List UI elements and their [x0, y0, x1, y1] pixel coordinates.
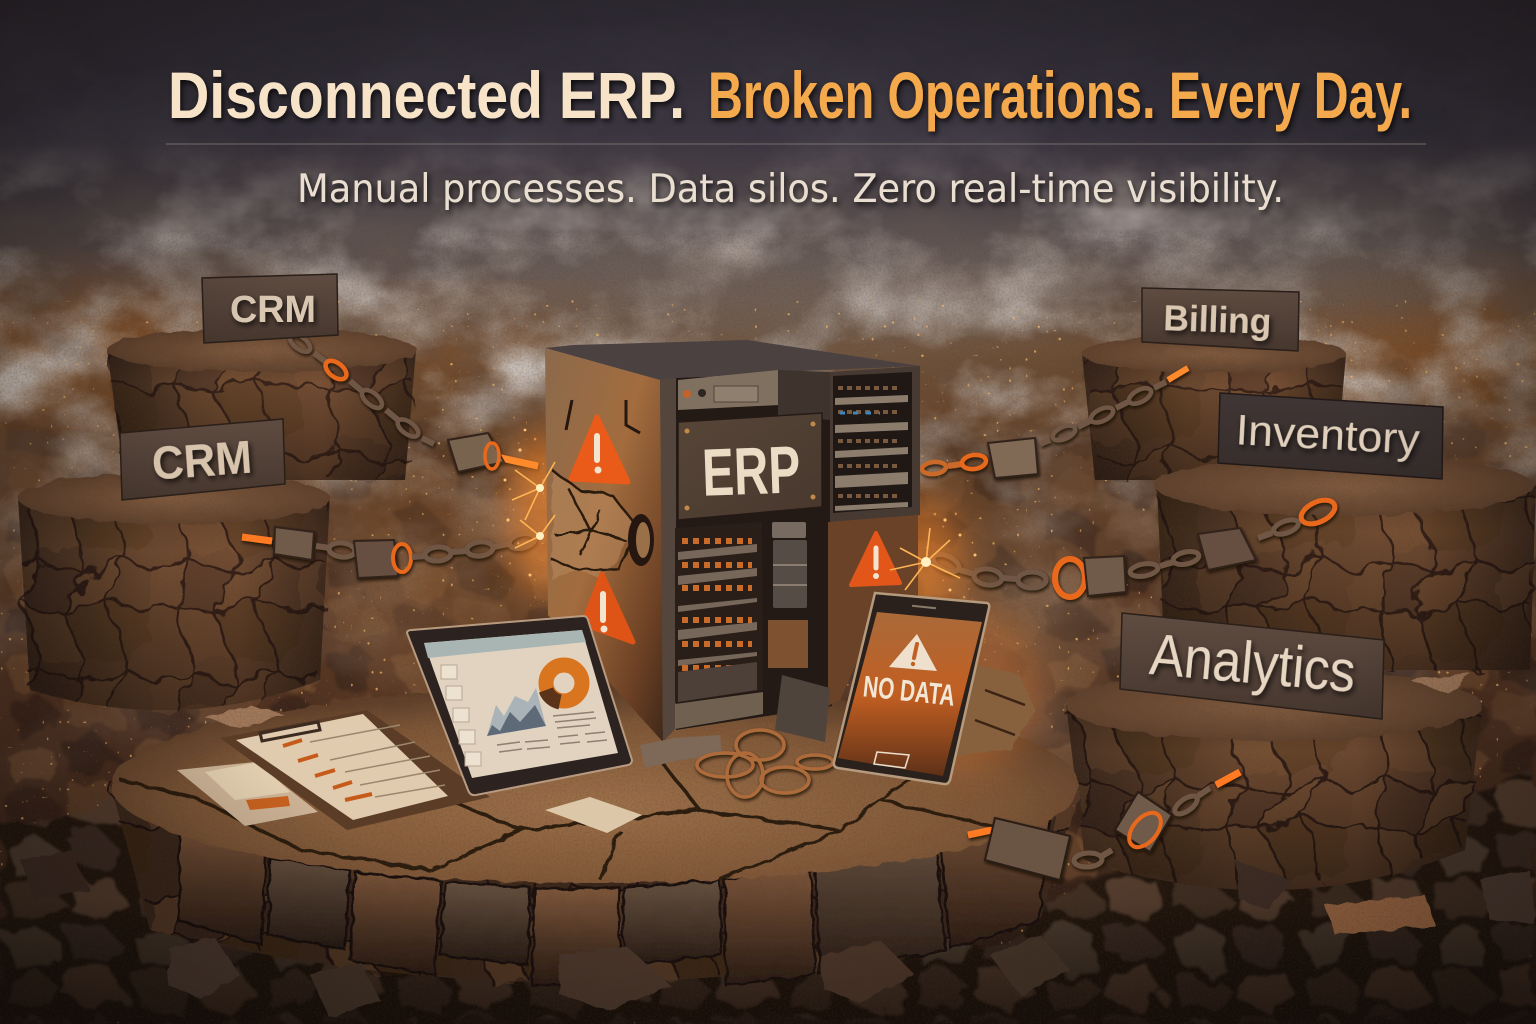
sign: Inventory: Inventory — [1235, 406, 1421, 464]
warning triangle: lower left — [583, 574, 633, 642]
glow behind server — [509, 425, 1040, 770]
phone message: NO DATA — [862, 670, 956, 713]
sign: Billing — [1142, 288, 1299, 351]
broken debris by the server — [640, 665, 1035, 768]
sign: Inventory — [1218, 393, 1443, 479]
phone warning triangle — [889, 634, 937, 671]
loose paper stack — [177, 762, 318, 826]
phone: NO DATA — [834, 593, 989, 784]
rubble ground — [0, 770, 1536, 1024]
server rack units lower — [675, 522, 763, 729]
grain overlay — [0, 230, 1536, 1024]
ERP nameplate — [678, 413, 822, 520]
sparks — [504, 429, 976, 612]
server top — [545, 340, 920, 380]
server right rack — [830, 366, 920, 522]
server left side panel — [545, 348, 663, 742]
pedestal: back left — [107, 328, 417, 480]
server right lower panel — [828, 515, 918, 706]
subtitle: Manual processes. Data silos. Zero real-time visibility. — [297, 167, 1284, 212]
sign: CRM front — [120, 419, 285, 500]
warning triangle: upper left — [571, 417, 628, 482]
sign: CRM back — [202, 274, 338, 343]
tablet area chart — [487, 688, 546, 736]
tablet text lines — [497, 712, 607, 752]
clipboard checklist — [220, 710, 490, 830]
pedestal: back right — [1082, 335, 1346, 480]
pedestal: front left — [18, 472, 330, 710]
ERP nameplate: ERP — [701, 432, 801, 511]
tablet dashboard — [407, 616, 632, 795]
sign: Analytics: Analytics — [1147, 622, 1358, 705]
server front post — [660, 378, 676, 742]
tangled copper chain — [697, 730, 833, 797]
ERP server cabinet — [545, 340, 920, 742]
sign: CRM front: CRM — [150, 431, 254, 489]
small note on platform — [545, 797, 642, 833]
pedestal: front right — [1066, 669, 1482, 890]
server upper bay — [778, 370, 830, 420]
server coil unit — [768, 522, 808, 668]
sign: Billing: Billing — [1163, 297, 1272, 342]
server top unit — [678, 370, 779, 410]
warning triangle: right — [851, 533, 900, 585]
tablet donut chart — [546, 665, 582, 701]
platform front blocks — [178, 800, 1050, 985]
sign: CRM back: CRM — [230, 289, 316, 331]
phone home button — [874, 752, 909, 768]
chain: Inventory to ERP — [930, 495, 1339, 597]
chain: Billing to ERP — [921, 368, 1188, 478]
pedestal: central platform — [111, 687, 1079, 985]
chain: CRM back to ERP — [287, 331, 538, 472]
title — [168, 58, 1412, 132]
chain: Analytics broken link — [968, 772, 1240, 880]
chain: CRM front to ERP — [242, 527, 536, 578]
rubble stones in foreground — [20, 672, 1536, 1018]
title: Disconnected ERP. — [168, 58, 685, 132]
ember field — [0, 300, 1536, 1024]
tablet sidebar icons — [441, 665, 481, 766]
pedestal: middle right — [1155, 456, 1536, 670]
server front body — [676, 372, 832, 730]
